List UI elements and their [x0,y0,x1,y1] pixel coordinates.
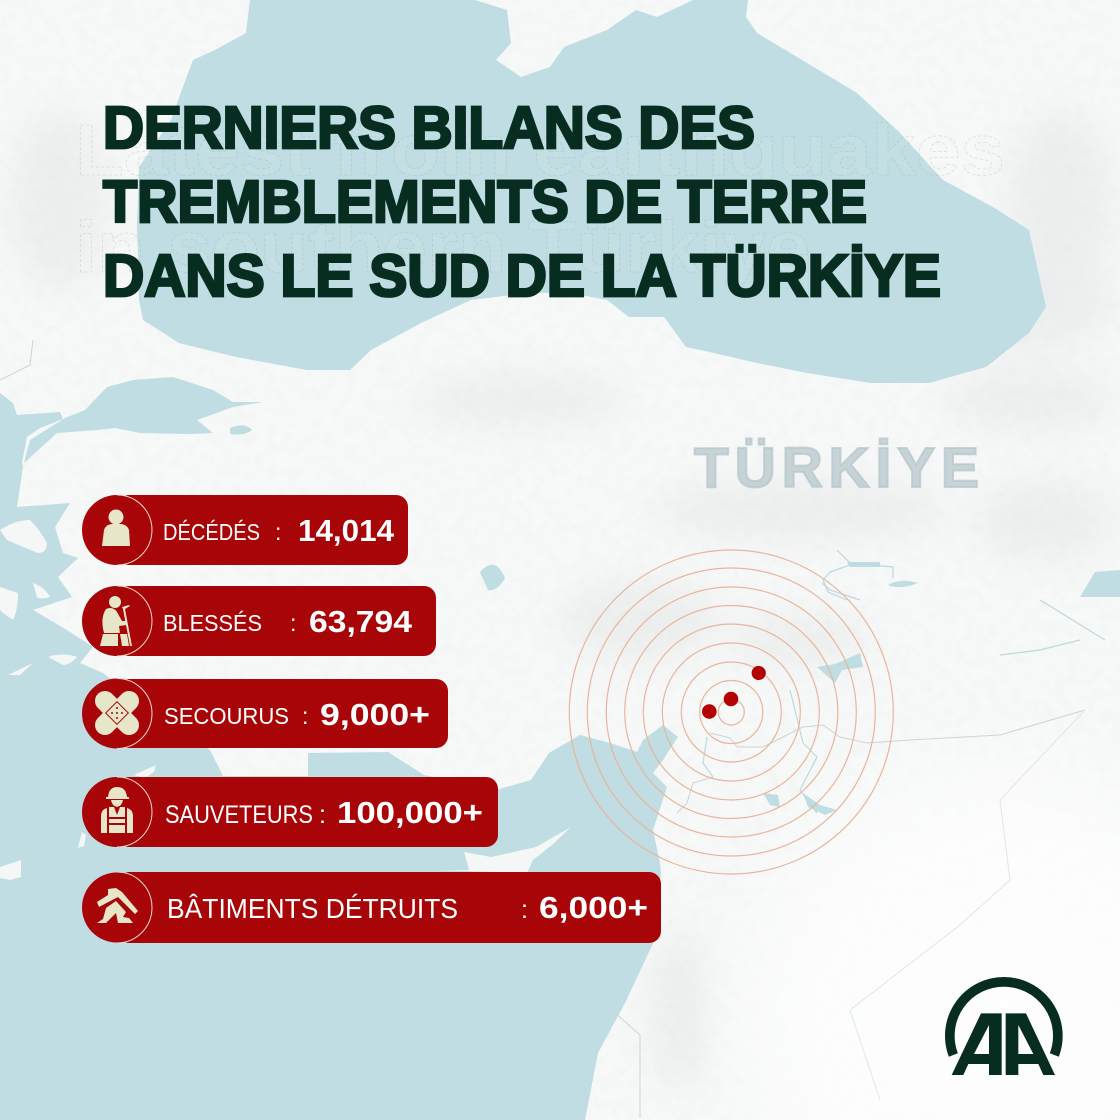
sea: Black Sea [137,0,1046,383]
logo: AA [950,982,1058,1075]
title: DERNIERS BILANS DES [103,95,755,161]
title [103,95,941,309]
stat: sauveteurs [82,777,498,847]
stat: décédés [82,495,408,565]
sea: Marmara [24,377,263,463]
lakes and rivers [480,562,1120,815]
stat: décédés: : [275,519,281,545]
stat: sauveteurs: SAUVETEURS [165,801,313,829]
stat: sauveteurs: : [319,801,326,829]
sea: Aegean and Mediterranean [0,503,678,1120]
stat: bâtiments détruits: BÂTIMENTS DÉTRUITS [167,893,458,924]
stat: secourus: SECOURUS [164,703,289,729]
borders [0,340,1085,1118]
islands [0,520,571,880]
ghost outlined text: Latest from earthquakes [75,111,1005,191]
stat: bâtiments détruits: : [521,896,528,924]
ghost outlined text [75,111,1005,288]
stat: blessés: BLESSÉS [163,610,262,636]
stat: sauveteurs: 100,000+ [337,795,483,830]
title: TREMBLEMENTS DE TERRE [103,169,867,235]
stat: décédés: DÉCÉDÉS [163,519,260,545]
epicenter rings [569,550,893,874]
stat: bâtiments détruits: 6,000+ [539,890,648,925]
country label: TÜRKİYE [694,436,979,500]
title: DANS LE SUD DE LA TÜRKİYE [103,243,941,309]
stat: bâtiments détruits [82,872,661,943]
stat: secourus: : [302,703,308,729]
icon: person [102,510,130,546]
earthquake markers [702,666,766,719]
stat: blessés: : [290,610,296,636]
icon: injured person with crutch [100,596,132,646]
stat: blessés [82,586,436,656]
ghost outlined text: in southern Türkiye [75,208,810,288]
stat: décédés: 14,014 [298,513,395,548]
icon: collapsed house [97,888,138,923]
icon: bandage [91,687,143,739]
stat: secourus: 9,000+ [320,697,430,732]
icon: rescue worker [101,787,133,833]
stat: blessés: 63,794 [309,604,413,639]
stat: secourus [82,678,448,748]
sea: Saros Gulf [0,393,63,510]
